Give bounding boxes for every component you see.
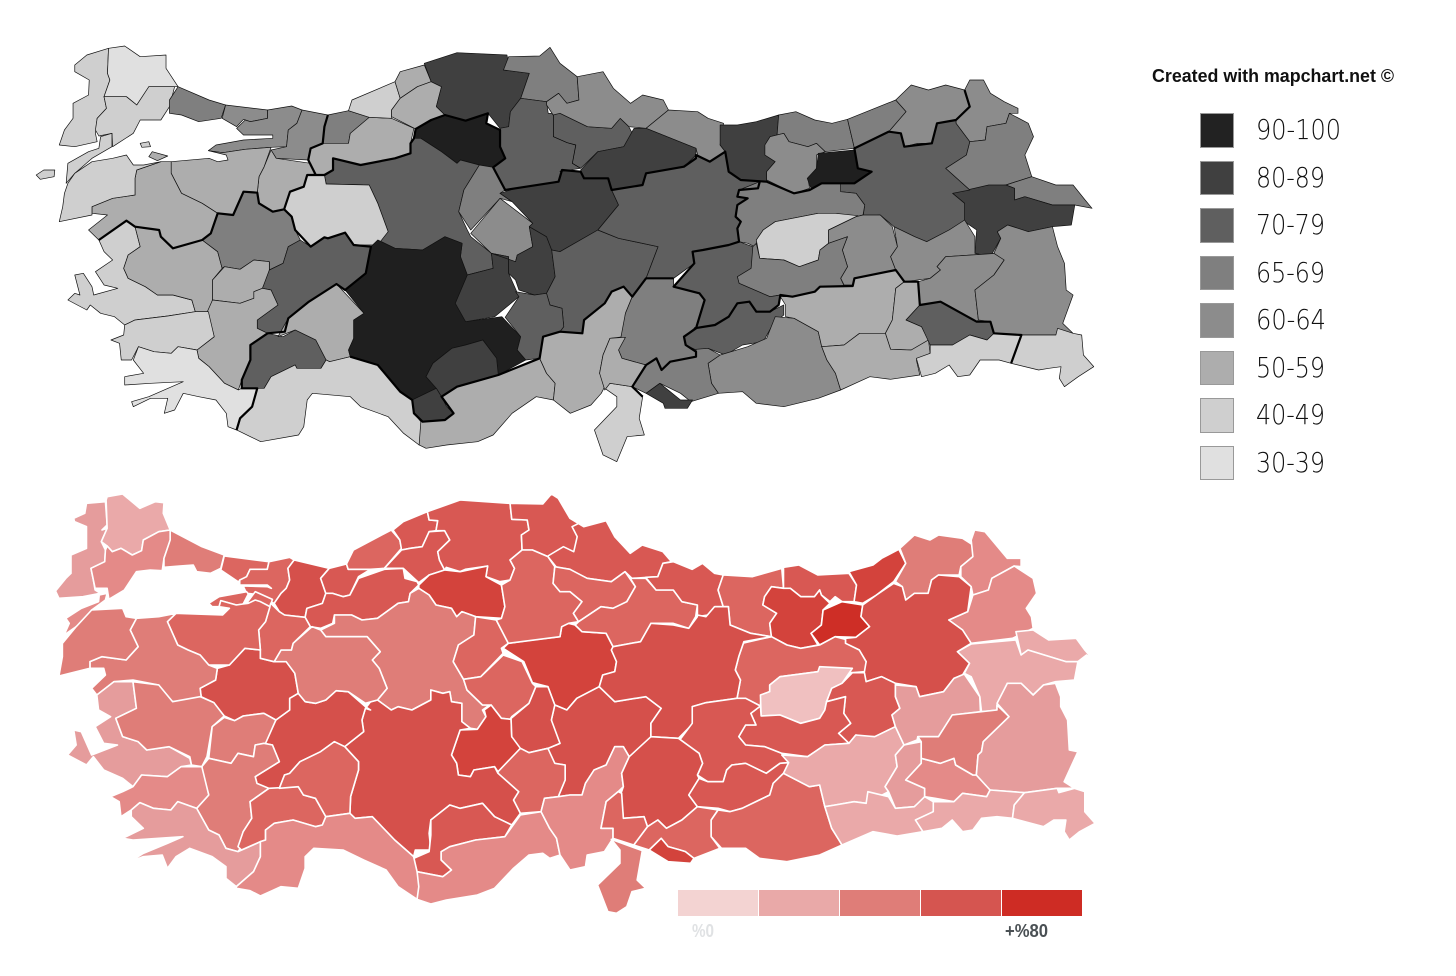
- map: grayscale provinces of Turkey: [36, 46, 1094, 462]
- legend item 65-69: 65-69: [1256, 257, 1325, 289]
- grayscale map: western half provinces: [36, 46, 658, 448]
- color scale bar: [678, 890, 1082, 916]
- legend item 70-79: 70-79: [1256, 209, 1325, 241]
- legend item 80-89: 80-89: [1256, 162, 1325, 194]
- legend item 30-39: [1200, 446, 1325, 480]
- legend item 65-69: [1200, 256, 1325, 290]
- legend item 70-79: [1200, 208, 1325, 242]
- legend item 40-49: 40-49: [1256, 399, 1325, 431]
- legend item 60-64: [1200, 304, 1326, 338]
- legend item 90-100: [1200, 114, 1341, 148]
- red map: eastern half provinces: [575, 530, 1095, 913]
- legend item 30-39: 30-39: [1256, 447, 1325, 479]
- map: red provinces of Turkey: [55, 494, 1095, 913]
- red map: western half provinces: [55, 494, 672, 904]
- grayscale map: eastern half provinces: [547, 72, 1094, 462]
- legend item 50-59: [1200, 352, 1325, 384]
- legend item 60-64: 60-64: [1256, 304, 1326, 336]
- scale label low: %0: [692, 921, 714, 941]
- attribution text: Created with mapchart.net ©: [1152, 66, 1394, 86]
- legend item 50-59: 50-59: [1256, 352, 1325, 384]
- legend item 40-49: [1200, 398, 1325, 432]
- scale label high: +%80: [1005, 921, 1048, 941]
- legend: grayscale percentage bands: [1200, 114, 1341, 480]
- legend item 90-100: 90-100: [1256, 114, 1341, 146]
- grayscale map: thick region boundaries, west: [99, 90, 970, 430]
- grayscale map: thick region boundaries, east: [632, 182, 1021, 397]
- legend item 80-89: [1200, 162, 1325, 194]
